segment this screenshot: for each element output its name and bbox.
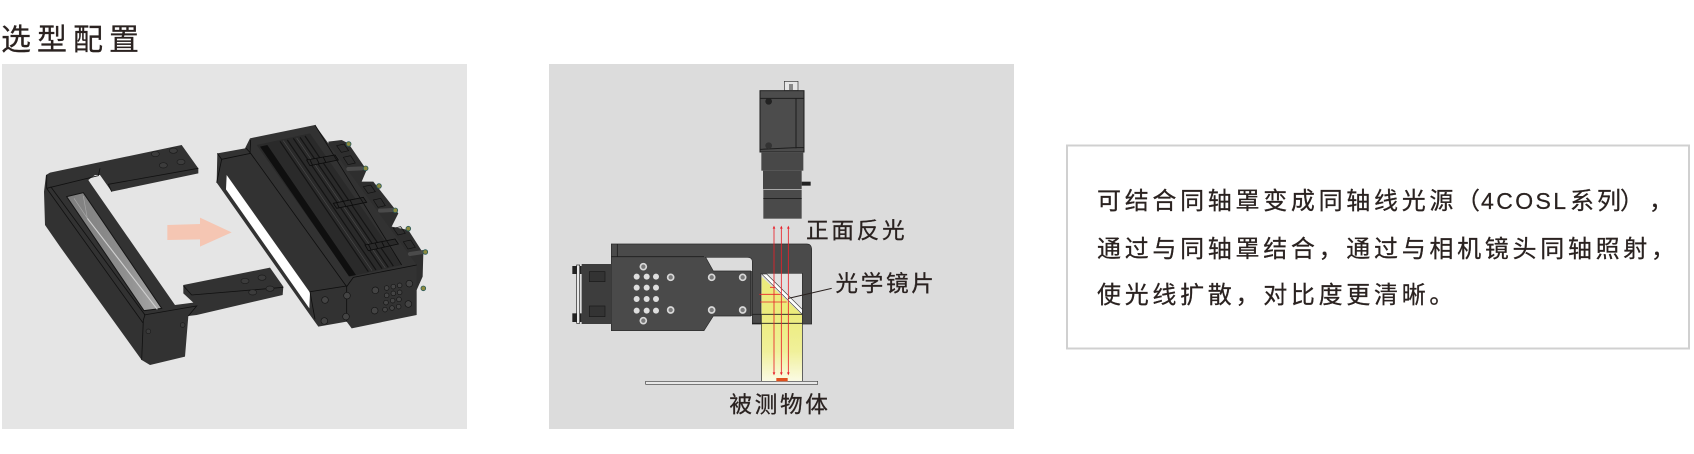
- text line 1: （: [1456, 188, 1484, 215]
- panel: coaxial light optical path diagram: [549, 64, 1014, 429]
- leader line: [788, 288, 832, 298]
- icon: light unit housing: [572, 244, 812, 331]
- icon: red light rays: [759, 226, 790, 375]
- text line 1: ，: [1649, 188, 1677, 215]
- text line 2: 通过与同轴罩结合，通过与相机镜头同轴照射，: [1097, 236, 1679, 263]
- text line 3: 使光线扩散，对比度更清晰。: [1097, 282, 1457, 309]
- label: optical mirror: 光学镜片: [835, 271, 937, 297]
- label: inspected object: 被测物体: [729, 392, 831, 418]
- stage plate and inspected object: [646, 378, 818, 384]
- label: front reflection: 正面反光: [806, 217, 907, 243]
- title: 选型配置: [1, 24, 145, 57]
- icon: U-shaped coaxial bracket: [44, 145, 283, 365]
- icon: camera: [760, 81, 811, 219]
- panel: description text box: [1067, 146, 1689, 348]
- text line 1: ）: [1620, 188, 1648, 215]
- text line 1: 系列: [1570, 188, 1624, 215]
- text line 1: 4COSL: [1481, 188, 1568, 214]
- icon: light beam and mirror: [761, 273, 802, 381]
- icon: linear light unit: [217, 125, 428, 328]
- text line 1: 可结合同轴罩变成同轴线光源: [1097, 188, 1457, 215]
- panel: exploded view of bracket and light: [2, 64, 467, 429]
- arrow: [167, 218, 232, 247]
